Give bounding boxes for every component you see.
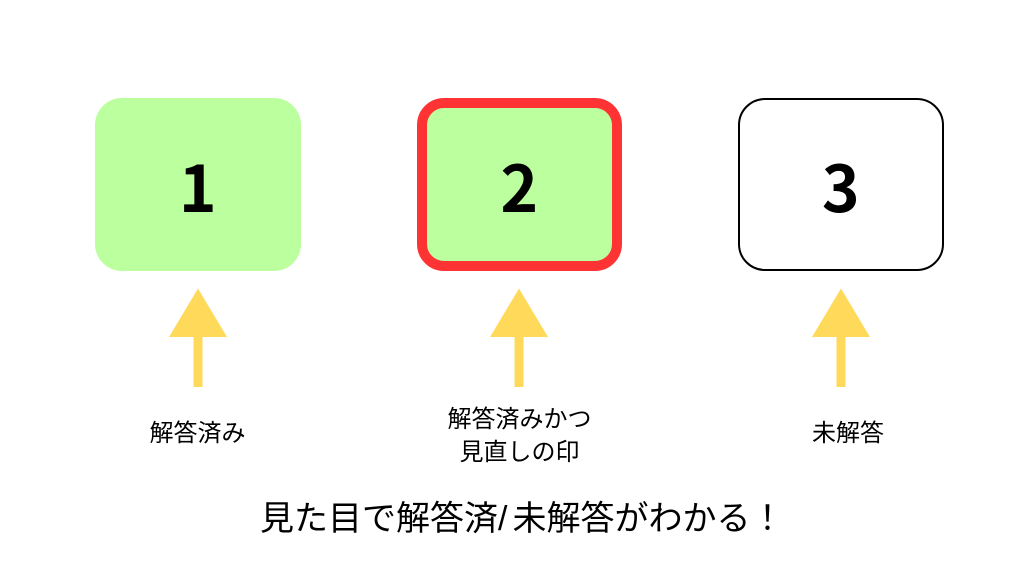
box 1: answered: 1 xyxy=(179,138,217,230)
label 1: 解答済み xyxy=(150,420,246,446)
label 2: 見直しの印 xyxy=(460,439,580,466)
arrow 3 xyxy=(812,288,870,387)
label 2: 解答済みかつ xyxy=(448,406,592,433)
box 1: answered xyxy=(95,98,300,271)
box 3: unanswered: 3 xyxy=(822,138,860,230)
box 2: answered and flagged for review xyxy=(416,98,622,271)
arrow 2 xyxy=(490,288,548,387)
label 2 xyxy=(448,406,592,466)
box 3: unanswered xyxy=(738,98,944,271)
caption: 見た目で解答済/未解答がわかる！ xyxy=(260,500,784,538)
box 2: answered and flagged for review: 2 xyxy=(500,138,538,230)
arrow 1 xyxy=(169,288,227,387)
label 3: 未解答 xyxy=(812,420,884,446)
